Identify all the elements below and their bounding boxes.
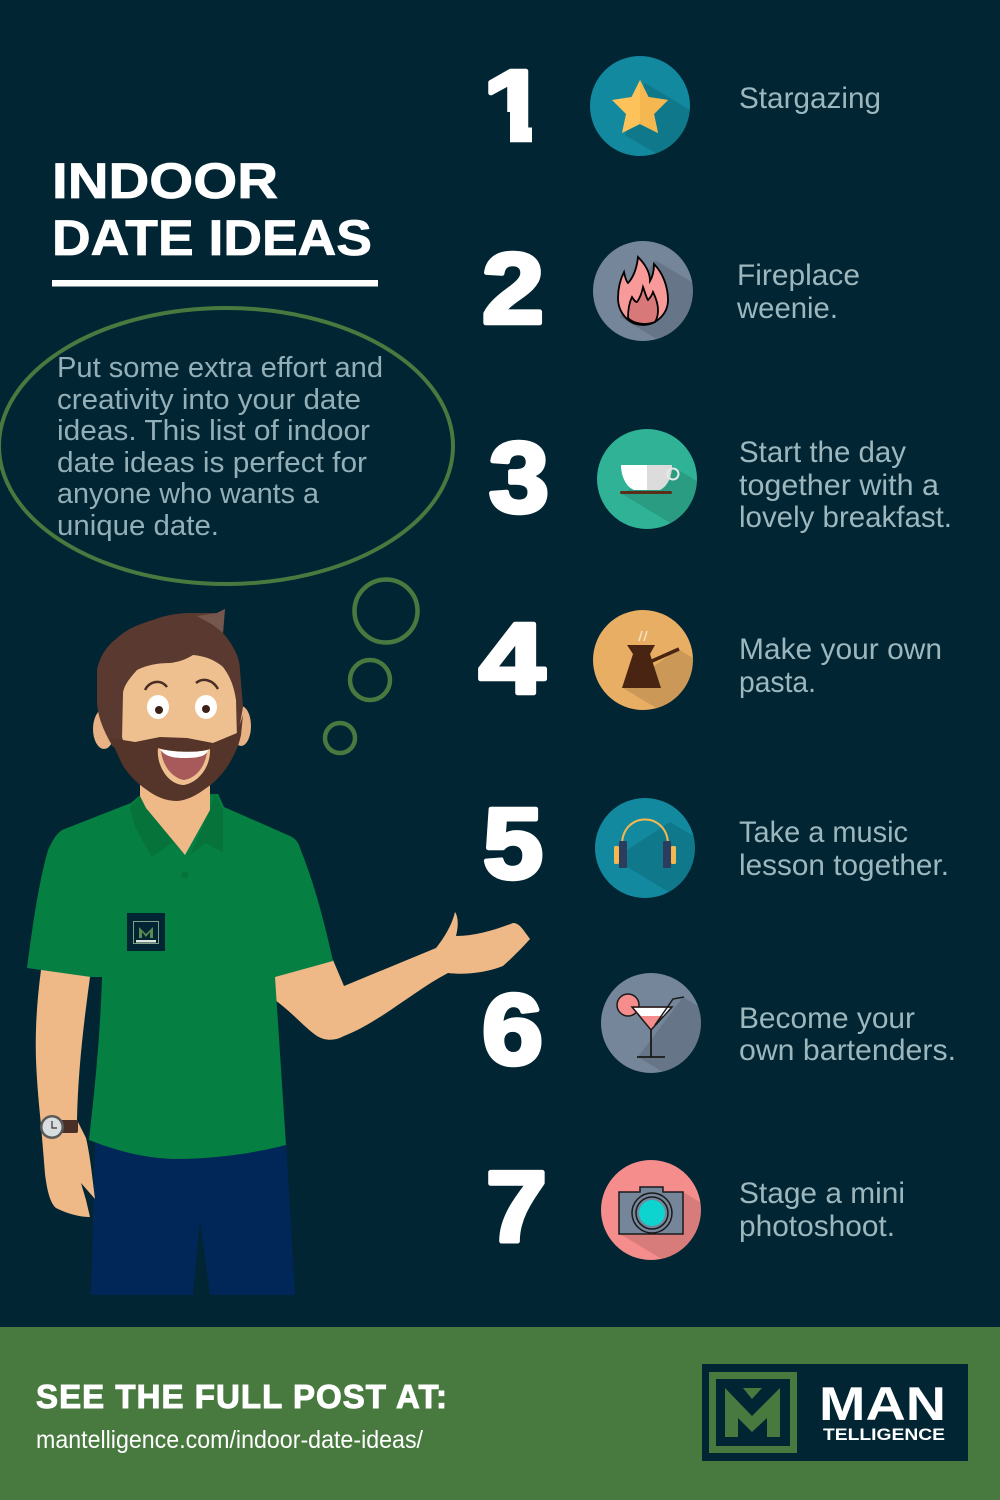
label: Make your own [739,633,942,666]
face [118,650,240,785]
label: Stage a mini [739,1177,905,1210]
number 6: 6 [482,974,543,1086]
lowered arm and hand [36,970,95,1217]
footer heading: SEE THE FULL POST AT: [36,1378,447,1415]
number 1: 1 [483,50,547,162]
number 4: 4 [479,603,545,715]
icon: camera [601,1160,701,1260]
label: Start the day [739,436,906,469]
number 5: 5 [483,788,543,900]
label [736,259,860,325]
label [739,1177,905,1243]
item 4: make pasta [478,610,940,710]
number 7: 7 [486,1151,547,1263]
eyes [147,695,217,719]
icon: headphones [595,798,695,898]
title [52,153,378,286]
item 5: music lesson [484,798,946,898]
collar [130,793,223,878]
label [739,1002,956,1067]
wristwatch [40,1115,78,1139]
intro paragraph: creativity into your date [57,384,361,416]
label: Become your [739,1002,915,1035]
intro paragraph: anyone who wants a [57,478,320,510]
number 3: 3 [489,422,549,534]
eyebrows [145,680,218,690]
footer url: mantelligence.com/indoor-date-ideas/ [36,1426,423,1454]
title: DATE IDEAS [52,210,372,266]
label: lesson together. [739,849,949,882]
number 2: 2 [482,233,544,345]
intro paragraph: unique date. [57,510,219,542]
logo: MAN [819,1377,946,1430]
item 1: stargazing [488,56,880,156]
icon: star [590,56,690,156]
pants [91,1140,295,1295]
hair highlight [197,609,225,633]
icon: turkish coffee pot [593,610,693,710]
item 6: bartenders [484,973,954,1073]
intro paragraph: ideas. This list of indoor [57,415,370,447]
item 3: breakfast [489,429,950,533]
shirt logo badge [127,913,165,951]
label: pasta. [739,666,816,699]
label: own bartenders. [739,1034,956,1067]
neck [140,780,210,855]
hair [97,609,243,747]
item 2: fireplace weenie [483,241,859,341]
label [739,436,952,534]
label [739,633,942,699]
label: photoshoot. [739,1210,895,1243]
icon: flame [593,241,693,341]
label: Take a music [739,816,908,849]
title: INDOOR [52,153,278,209]
raised arm and hand [275,912,530,1040]
label: lovely breakfast. [739,501,952,534]
illustration: smiling bearded man in green polo [27,609,530,1295]
label [739,816,949,882]
footer band [0,1327,1000,1500]
intro paragraph: Put some extra effort and [57,352,383,384]
label: Stargazing [739,82,881,115]
polo shirt [27,794,333,1159]
mouth [158,748,210,785]
ears [93,706,251,749]
label: Fireplace [737,259,860,292]
icon: cocktail glass [601,973,701,1073]
logo [702,1364,968,1461]
beard [110,715,243,801]
label: together with a [739,469,939,502]
item 7: photoshoot [488,1160,903,1260]
label: weenie. [736,292,838,325]
intro paragraph [57,352,383,542]
logo: TELLIGENCE [823,1425,945,1444]
thought bubble [0,308,453,753]
intro paragraph: date ideas is perfect for [57,447,367,479]
icon: coffee cup [597,429,697,529]
